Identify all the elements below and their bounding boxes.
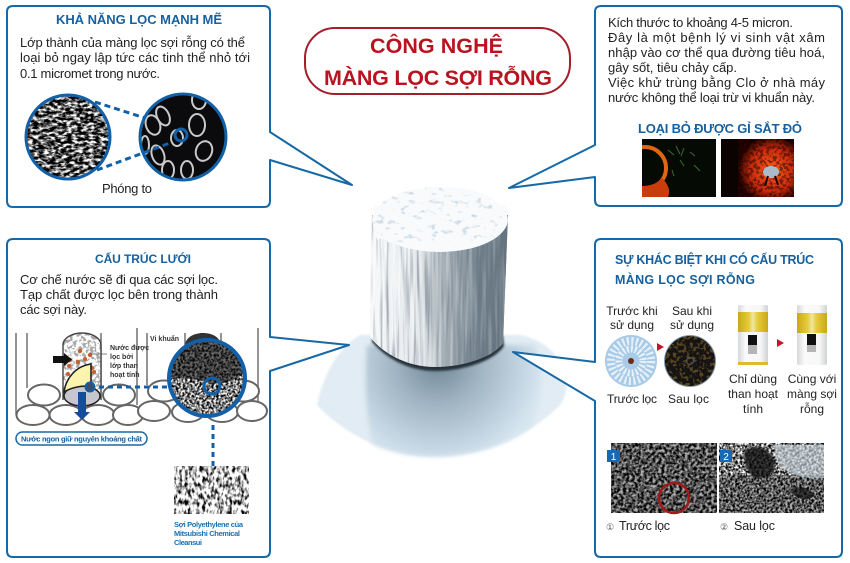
cup: with hollow fiber (797, 305, 827, 365)
micrograph: enlarged hollow fibers (140, 91, 226, 180)
vertical fibers (16, 328, 258, 415)
cut-away fiber tube (63, 333, 101, 406)
cup: activated carbon only (738, 305, 768, 365)
red arrow (777, 339, 784, 347)
cartridge dark base (372, 332, 504, 371)
caption: carbon only (728, 372, 779, 416)
caption: polyethylene fiber (174, 520, 244, 547)
cartridge body with vertical fibers (368, 210, 510, 370)
body text (608, 15, 826, 105)
hollow fiber filter cartridge (368, 186, 510, 371)
body text: loại bỏ ngay lập tức các tinh thể nhỏ tới (20, 50, 250, 65)
heading: CẤU TRÚC LƯỚI (95, 251, 191, 266)
dark fiber dome (185, 333, 221, 345)
panel outline with pointer (7, 6, 352, 207)
body text: nhập vào cơ thể qua đường tiêu hoá, (608, 45, 825, 60)
caption: polyethylene fiber: Mitsubishi Chemical (174, 529, 240, 538)
filter disc before (605, 335, 657, 387)
body text: 0.1 micromet trong nước. (20, 66, 160, 81)
panel: bacteria and rust (509, 6, 842, 206)
upper fiber ring row (28, 380, 259, 406)
caption: carbon only: than hoạt (728, 387, 779, 401)
caption: polyethylene fiber: Cleansui (174, 538, 202, 547)
caption: Phóng to (102, 181, 152, 196)
SEM caption before: ① (606, 522, 614, 532)
labels above discs: Sau khi (672, 304, 712, 318)
heading: KHẢ NĂNG LỌC MẠNH MẼ (56, 12, 222, 27)
lower fiber ring row (16, 401, 267, 425)
body text: Cơ chế nước sẽ đi qua các sợi lọc. (20, 272, 218, 287)
magnified cross-section (168, 340, 246, 416)
labels below discs (607, 392, 709, 406)
diagram: hollow fiber mesh (16, 328, 267, 467)
caption: carbon only: Chỉ dùng (729, 372, 777, 386)
body text: Kích thước to khoảng 4-5 micron. (608, 15, 793, 30)
heading (615, 252, 814, 287)
photo: polyethylene fiber (174, 466, 249, 514)
caption: with hollow fiber: Cùng với (788, 372, 836, 386)
SEM photo before (607, 443, 717, 513)
body text: Việc khử trùng bằng Clo ở nhà máy (608, 75, 826, 90)
photo: rust right (721, 139, 794, 197)
label: bacteria: Vi khuẩn (150, 335, 179, 343)
label: carbon layer (110, 345, 149, 379)
body text: Đây là một bệnh lý vi sinh vật xâm (608, 30, 825, 45)
title line two: MÀNG LỌC SỢI RỖNG (324, 64, 552, 90)
labels above discs: sử dụng (670, 318, 714, 332)
labels above discs: sử dụng (610, 318, 654, 332)
body text: nước không thể loại trừ vi khuẩn này. (608, 90, 815, 105)
body text: Tạp chất được lọc bên trong thành (20, 287, 218, 302)
small marker circle (86, 382, 94, 392)
caption: with hollow fiber: rỗng (800, 401, 824, 416)
cartridge top face texture (372, 186, 508, 252)
label: carbon layer: Nước được (110, 345, 149, 352)
dashed drop line (212, 425, 214, 467)
panel outline with pointer (7, 239, 349, 557)
label: carbon layer: lớp than (110, 363, 138, 370)
body text (20, 35, 250, 81)
blue outflow arrow (74, 392, 90, 420)
SEM caption after: ② (720, 522, 728, 532)
SEM photo after: 2 (723, 452, 729, 463)
SEM photo before: 1 (611, 452, 617, 463)
title line one: CÔNG NGHỆ (370, 33, 503, 58)
panel: mesh structure (7, 239, 349, 557)
caption: with hollow fiber (787, 372, 837, 416)
dashed zoom lines (95, 102, 170, 170)
shadow under filter cartridge (317, 335, 567, 457)
caption: with hollow fiber: màng sợi (787, 387, 837, 401)
body text: gây sốt, tiêu chảy cấp. (608, 60, 737, 75)
SEM caption after: Sau lọc (734, 519, 775, 533)
SEM photo after (719, 443, 824, 513)
mineral water pill (16, 432, 147, 445)
caption: carbon only: tính (743, 402, 763, 416)
caption: polyethylene fiber: Sợi Polyethylene của (174, 520, 244, 529)
labels below discs: Sau lọc (668, 392, 709, 406)
labels below discs: Trước lọc (607, 392, 657, 406)
filter disc after (664, 335, 716, 387)
heading: MÀNG LỌC SỢI RỖNG (615, 272, 755, 287)
cartridge scalloped top rim (374, 205, 507, 252)
heading: SỰ KHÁC BIỆT KHI CÓ CẤU TRÚC (615, 252, 814, 267)
label: carbon layer: hoạt tính (110, 372, 140, 379)
labels above discs: Trước khi (606, 304, 658, 318)
SEM caption before: Trước lọc (619, 519, 670, 533)
photo: rust left (642, 139, 716, 197)
body text: Lớp thành của màng lọc sợi rỗng có thể (20, 35, 245, 50)
panel outline with pointer (513, 239, 842, 557)
heading: LOẠI BỎ ĐƯỢC GỈ SẮT ĐỎ (638, 121, 802, 136)
red arrow (657, 343, 664, 351)
dashed link line (90, 386, 170, 388)
label: carbon layer: lọc bởi (110, 354, 133, 361)
labels above discs (606, 304, 714, 332)
panel outline with pointer (509, 6, 842, 206)
micrograph: fiber surface (26, 95, 110, 179)
panel: filtering capability (7, 6, 352, 207)
body text (20, 272, 218, 317)
mineral water pill: Nước ngon giữ nguyên khoáng chất (21, 434, 142, 444)
black inflow arrow (53, 353, 72, 366)
panel: difference with hollow fiber (513, 239, 842, 557)
leader line (90, 353, 107, 355)
title box (305, 28, 570, 94)
body text: các sợi này. (20, 302, 87, 317)
